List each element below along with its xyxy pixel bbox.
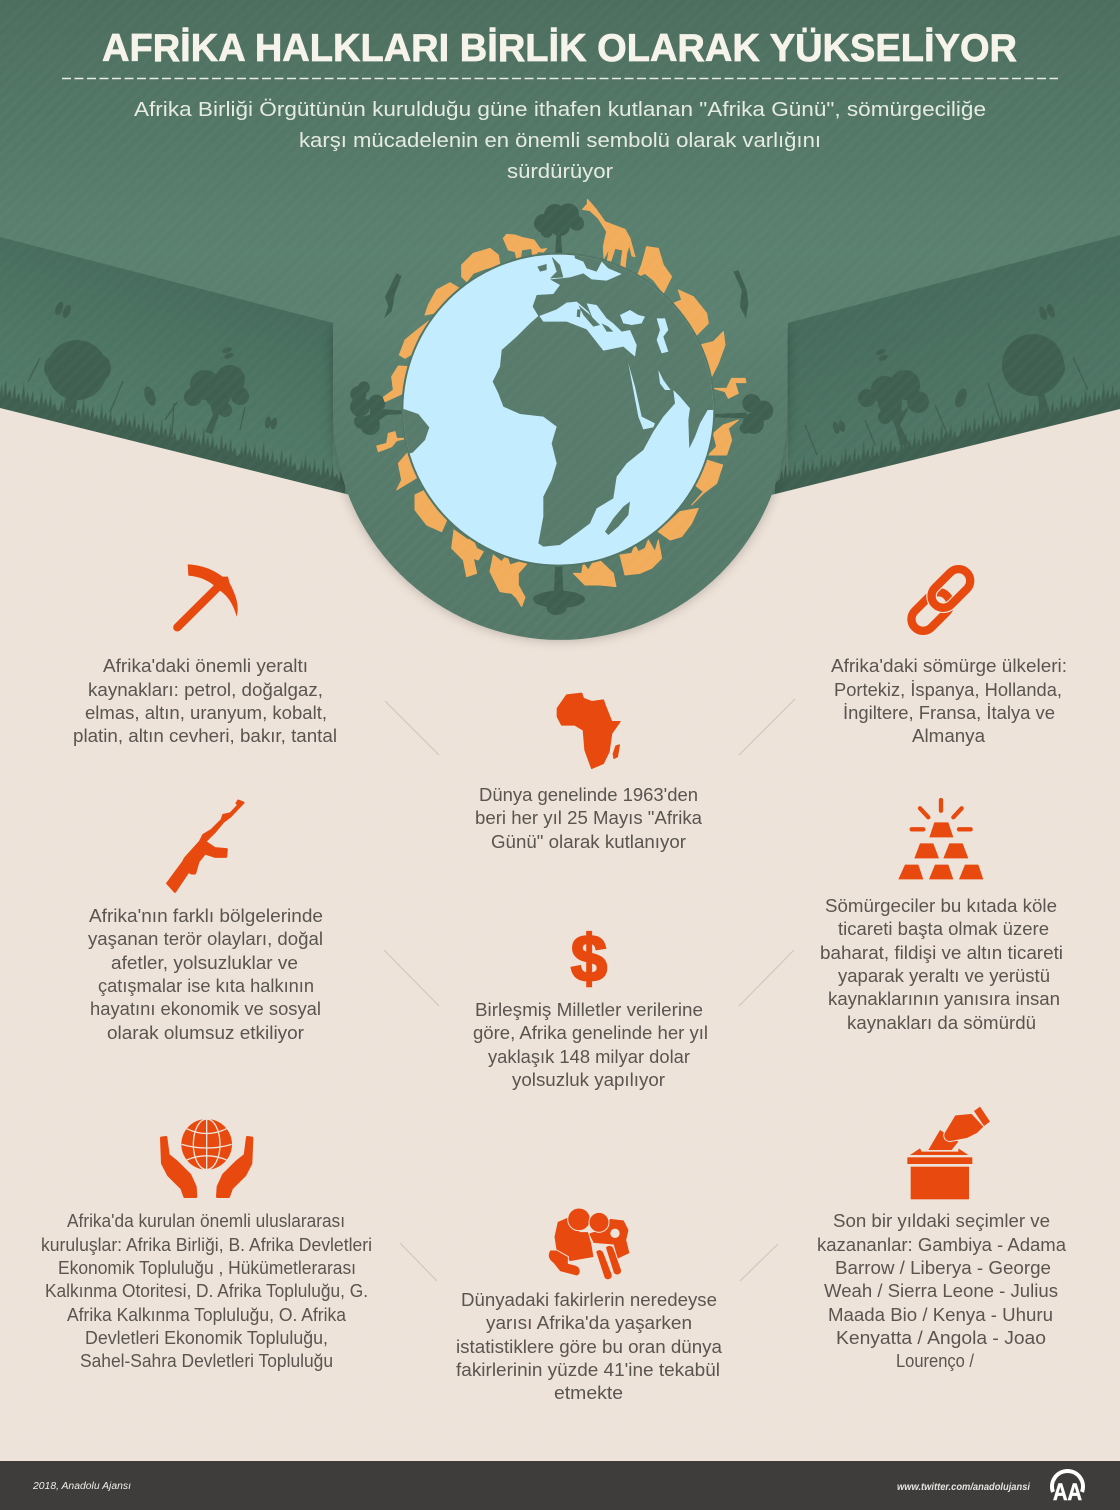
subtitle: Afrika Birliği Örgütünün kurulduğu güne ithafen kutlanan "Afrika Günü", sömürgeciliğe — [134, 99, 986, 121]
text: election winners: Barrow / Liberya - George — [835, 1258, 1051, 1278]
icon: rifle — [167, 801, 243, 892]
right grass — [775, 357, 1120, 500]
text: colonial countries: İngiltere, Fransa, İtalya ve — [843, 703, 1055, 723]
text: underground resources: elmas, altın, uranyum, kobalt, — [85, 703, 327, 723]
text: corruption: yaklaşık 148 milyar dolar — [488, 1047, 690, 1067]
text: colonial countries — [831, 656, 1067, 746]
text: underground resources: kaynakları: petrol, doğalgaz, — [88, 680, 323, 700]
safari animals — [377, 199, 746, 607]
text: election winners: Lourenço / — [896, 1351, 974, 1371]
text: africa day: Günü" olarak kutlanıyor — [491, 832, 686, 852]
text: poverty: fakirlerinin yüzde 41'ine tekabül — [456, 1360, 720, 1380]
left butterflies — [54, 301, 278, 430]
text: poverty: istatistiklere göre bu oran dünya — [456, 1337, 723, 1357]
text: poverty: yarısı Afrika'da yaşarken — [486, 1313, 692, 1333]
text: colonial exploitation: kaynaklarının yanısıra insan — [828, 989, 1060, 1009]
text: africa day: Dünya genelinde 1963'den — [479, 785, 698, 805]
icon: dollar sign: $ — [571, 921, 607, 995]
subtitle: karşı mücadelenin en önemli sembolü olarak varlığını — [299, 130, 821, 152]
beige content ground — [0, 408, 1120, 1461]
text: organisations: Ekonomik Topluluğu , Hükümetlerarası — [58, 1258, 356, 1278]
inland seas — [539, 302, 671, 429]
text: colonial exploitation: kaynakları da sömürdü — [847, 1013, 1036, 1033]
text: colonial exploitation: ticareti başta olmak üzere — [838, 919, 1049, 939]
logo: AA: AA — [1053, 1479, 1082, 1506]
text: colonial countries: Almanya — [912, 726, 986, 746]
text: corruption: göre, Afrika genelinde her yıl — [473, 1023, 708, 1043]
text: corruption: yolsuzluk yapılıyor — [512, 1070, 665, 1090]
text: colonial exploitation: Sömürgeciler bu kıtada köle — [825, 896, 1057, 916]
left trees — [44, 340, 249, 434]
text: colonial countries: Portekiz, İspanya, Hollanda, — [834, 680, 1062, 700]
text: election winners: Kenyatta / Angola - Joao — [836, 1328, 1046, 1348]
text: terror and disasters: afetler, yolsuzluklar ve — [111, 953, 298, 973]
text: organisations: Sahel-Sahra Devletleri Topluluğu — [80, 1351, 333, 1371]
text: organisations: Afrika'da kurulan önemli uluslararası — [67, 1211, 345, 1231]
text: terror and disasters: olarak olumsuz etkiliyor — [107, 1023, 304, 1043]
logo: AA — [1052, 1471, 1083, 1506]
text: colonial exploitation — [820, 896, 1063, 1033]
text: election winners: Son bir yıldaki seçimler ve — [833, 1211, 1050, 1231]
globe — [397, 240, 730, 567]
right butterflies — [832, 303, 1056, 434]
text: organisations: Afrika Kalkınma Topluluğu, O. Afrika — [67, 1305, 347, 1325]
dark trees around globe — [350, 203, 773, 615]
text: colonial exploitation: yaparak yeraltı ve yerüstü — [838, 966, 1050, 986]
text: corruption — [473, 1000, 708, 1090]
text: underground resources: platin, altın cevheri, bakır, tantal — [73, 726, 337, 746]
animal ring and globe — [350, 199, 773, 615]
text: colonial countries: Afrika'daki sömürge ülkeleri: — [831, 656, 1067, 676]
twitter address: www.twitter.com/anadolujansi — [897, 1482, 1030, 1493]
left grass — [0, 358, 345, 500]
icon: hands holding globe — [161, 1119, 252, 1197]
text: organisations — [41, 1211, 372, 1371]
text: organisations: kuruluşlar: Afrika Birliği, B. Afrika Devletleri — [41, 1235, 372, 1255]
text: africa day: beri her yıl 25 Mayıs "Afrika — [475, 808, 703, 828]
text: organisations: Kalkınma Otoritesi, D. Afrika Topluluğu, G. — [45, 1281, 368, 1301]
text: underground resources — [73, 656, 337, 746]
text: election winners — [817, 1211, 1067, 1371]
text: poverty — [456, 1290, 723, 1403]
text: underground resources: Afrika'daki önemli yeraltı — [103, 656, 308, 676]
icon: africa map — [557, 693, 620, 768]
text: terror and disasters — [88, 906, 323, 1043]
footer — [0, 1461, 1120, 1510]
continents — [403, 256, 714, 547]
text: terror and disasters: hayatını ekonomik ve sosyal — [90, 999, 321, 1019]
italy and islands — [577, 305, 613, 332]
globe dome — [333, 240, 787, 640]
text: colonial exploitation: baharat, fildişi ve altın ticareti — [820, 943, 1063, 963]
icon: gold bars — [898, 800, 983, 879]
subtitle: sürdürüyor — [507, 161, 613, 183]
title: AFRİKA HALKLARI BİRLİK OLARAK YÜKSELİYOR — [102, 27, 1017, 70]
icon: ballot box — [907, 1107, 990, 1199]
left savanna panel — [0, 237, 345, 500]
text: terror and disasters: yaşanan terör olayları, doğal — [88, 929, 323, 949]
text: corruption: Birleşmiş Milletler verilerine — [475, 1000, 703, 1020]
icon: pickaxe — [177, 564, 238, 627]
text: africa day — [475, 785, 703, 852]
text: poverty: etmekte — [554, 1383, 623, 1403]
text: terror and disasters: çatışmalar ise kıta halkının — [98, 976, 314, 996]
text: organisations: Devletleri Ekonomik Topluluğu, — [85, 1328, 328, 1348]
text: election winners: Maada Bio / Kenya - Uhuru — [828, 1305, 1053, 1325]
right trees — [858, 334, 1065, 445]
text: terror and disasters: Afrika'nın farklı bölgelerinde — [89, 906, 323, 926]
text: election winners: kazananlar: Gambiya - Adama — [817, 1235, 1067, 1255]
text: election winners: Weah / Sierra Leone - Julius — [824, 1281, 1058, 1301]
title divider — [62, 78, 1058, 80]
icon: people in poverty — [548, 1208, 630, 1280]
connector lines — [384, 699, 795, 1281]
icon: chain link — [907, 564, 975, 636]
text: poverty: Dünyadaki fakirlerin neredeyse — [461, 1290, 717, 1310]
credit: 2018, Anadolu Ajansı — [32, 1481, 131, 1492]
right savanna panel — [775, 235, 1120, 500]
subtitle — [134, 99, 986, 183]
